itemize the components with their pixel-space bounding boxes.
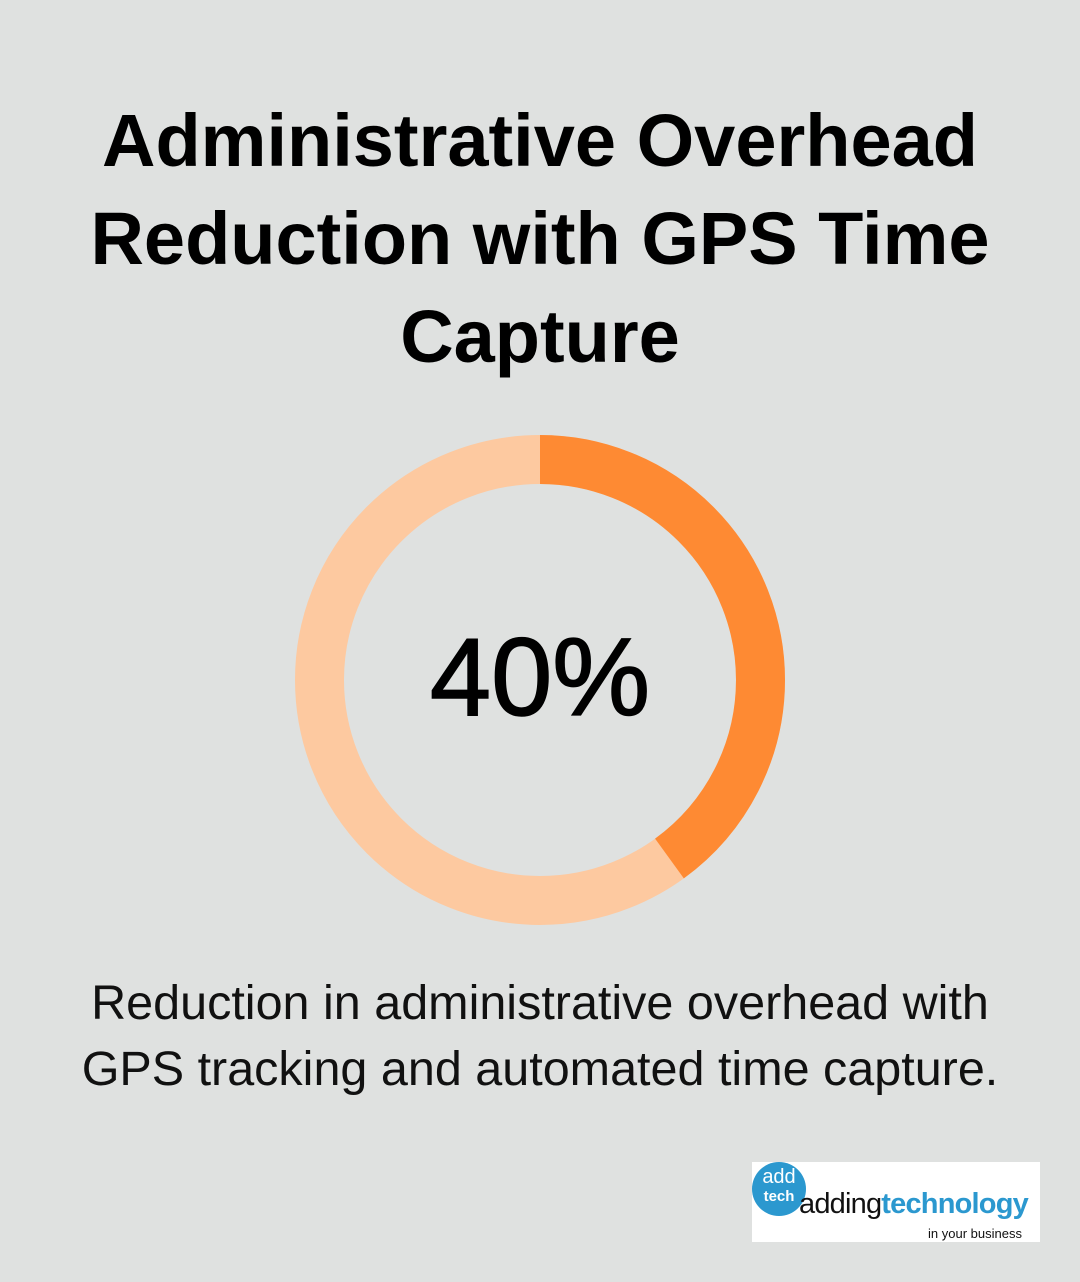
description: Reduction in administrative overhead with xyxy=(91,976,989,1030)
logo: add xyxy=(762,1166,796,1188)
description: GPS tracking and automated time capture. xyxy=(82,1042,998,1096)
description xyxy=(82,976,998,1096)
title xyxy=(90,99,990,378)
title: Administrative Overhead xyxy=(102,99,978,182)
logo: addingtechnology xyxy=(799,1188,1028,1220)
logo: tech xyxy=(764,1188,794,1205)
logo xyxy=(752,1162,1040,1242)
logo: in your business xyxy=(928,1226,1022,1241)
donut chart: 40% xyxy=(430,616,650,739)
title: Reduction with GPS Time xyxy=(90,197,990,280)
title: Capture xyxy=(400,295,680,378)
